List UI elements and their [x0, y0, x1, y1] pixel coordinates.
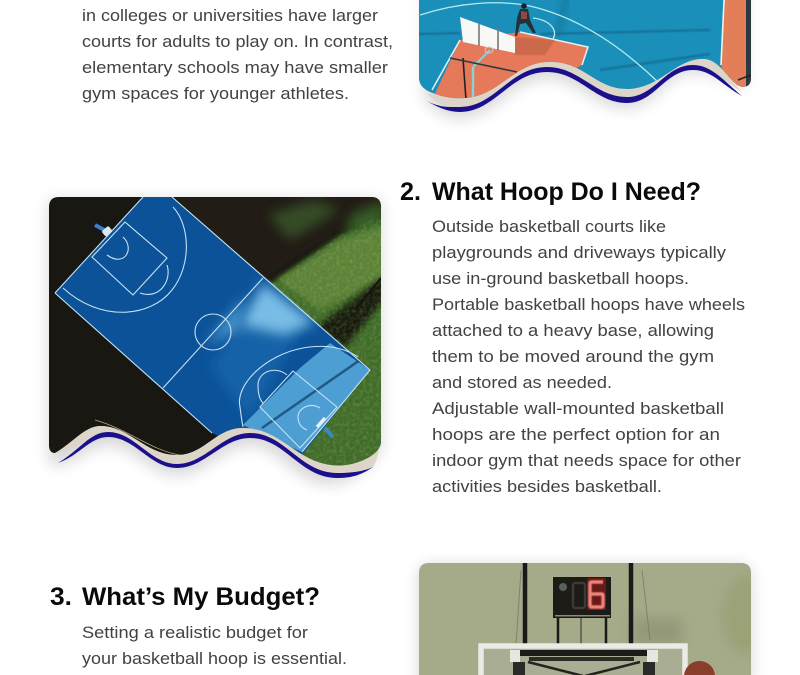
text block: hoop types: Adjustable wall-mounted basketball — [432, 399, 724, 418]
heading: What Hoop Do I Need: What Hoop Do I Need? — [432, 178, 701, 206]
text block: school courts: courts for adults to play on. In contrast, — [82, 32, 393, 51]
icon: shot clock — [553, 577, 611, 618]
icon: basketball — [684, 661, 715, 675]
text block: hoop types: Outside basketball courts like — [432, 217, 666, 236]
text block: hoop types: and stored as needed. — [432, 373, 612, 392]
text block: school courts: elementary schools may have smaller — [82, 58, 388, 77]
text block: hoop types: indoor gym that needs space for other — [432, 451, 741, 470]
text block: hoop types — [432, 217, 745, 496]
text block: hoop types: activities besides basketball. — [432, 477, 662, 496]
text block: hoop types: hoops are the perfect option for an — [432, 425, 720, 444]
text block: budget — [82, 623, 347, 668]
text block: hoop types: Portable basketball hoops have wheels — [432, 295, 745, 314]
text block: hoop types: them to be moved around the gym — [432, 347, 714, 366]
text block: school courts: in colleges or universities have larger — [82, 6, 378, 25]
heading: What Hoop Do I Need: 2. — [400, 178, 421, 206]
icon: player — [515, 3, 536, 36]
photo: aerial blue court with wave edge — [49, 190, 400, 484]
text block: hoop types: playgrounds and driveways typically — [432, 243, 727, 262]
text block: hoop types: use in-ground basketball hoops. — [432, 269, 689, 288]
text block: school courts: gym spaces for younger athletes. — [82, 84, 349, 103]
text block: school courts — [82, 6, 393, 103]
icon: backboard — [481, 646, 685, 675]
text block: hoop types: attached to a heavy base, allowing — [432, 321, 714, 340]
photo: hoop with shot clock — [419, 563, 767, 675]
photo: orange and blue court with wave edge — [419, 0, 751, 118]
text block: budget: your basketball hoop is essential. — [82, 649, 347, 668]
heading: What's My Budget: 3. — [50, 583, 72, 611]
text block: budget: Setting a realistic budget for — [82, 623, 308, 642]
heading: What's My Budget: What’s My Budget? — [82, 583, 320, 611]
